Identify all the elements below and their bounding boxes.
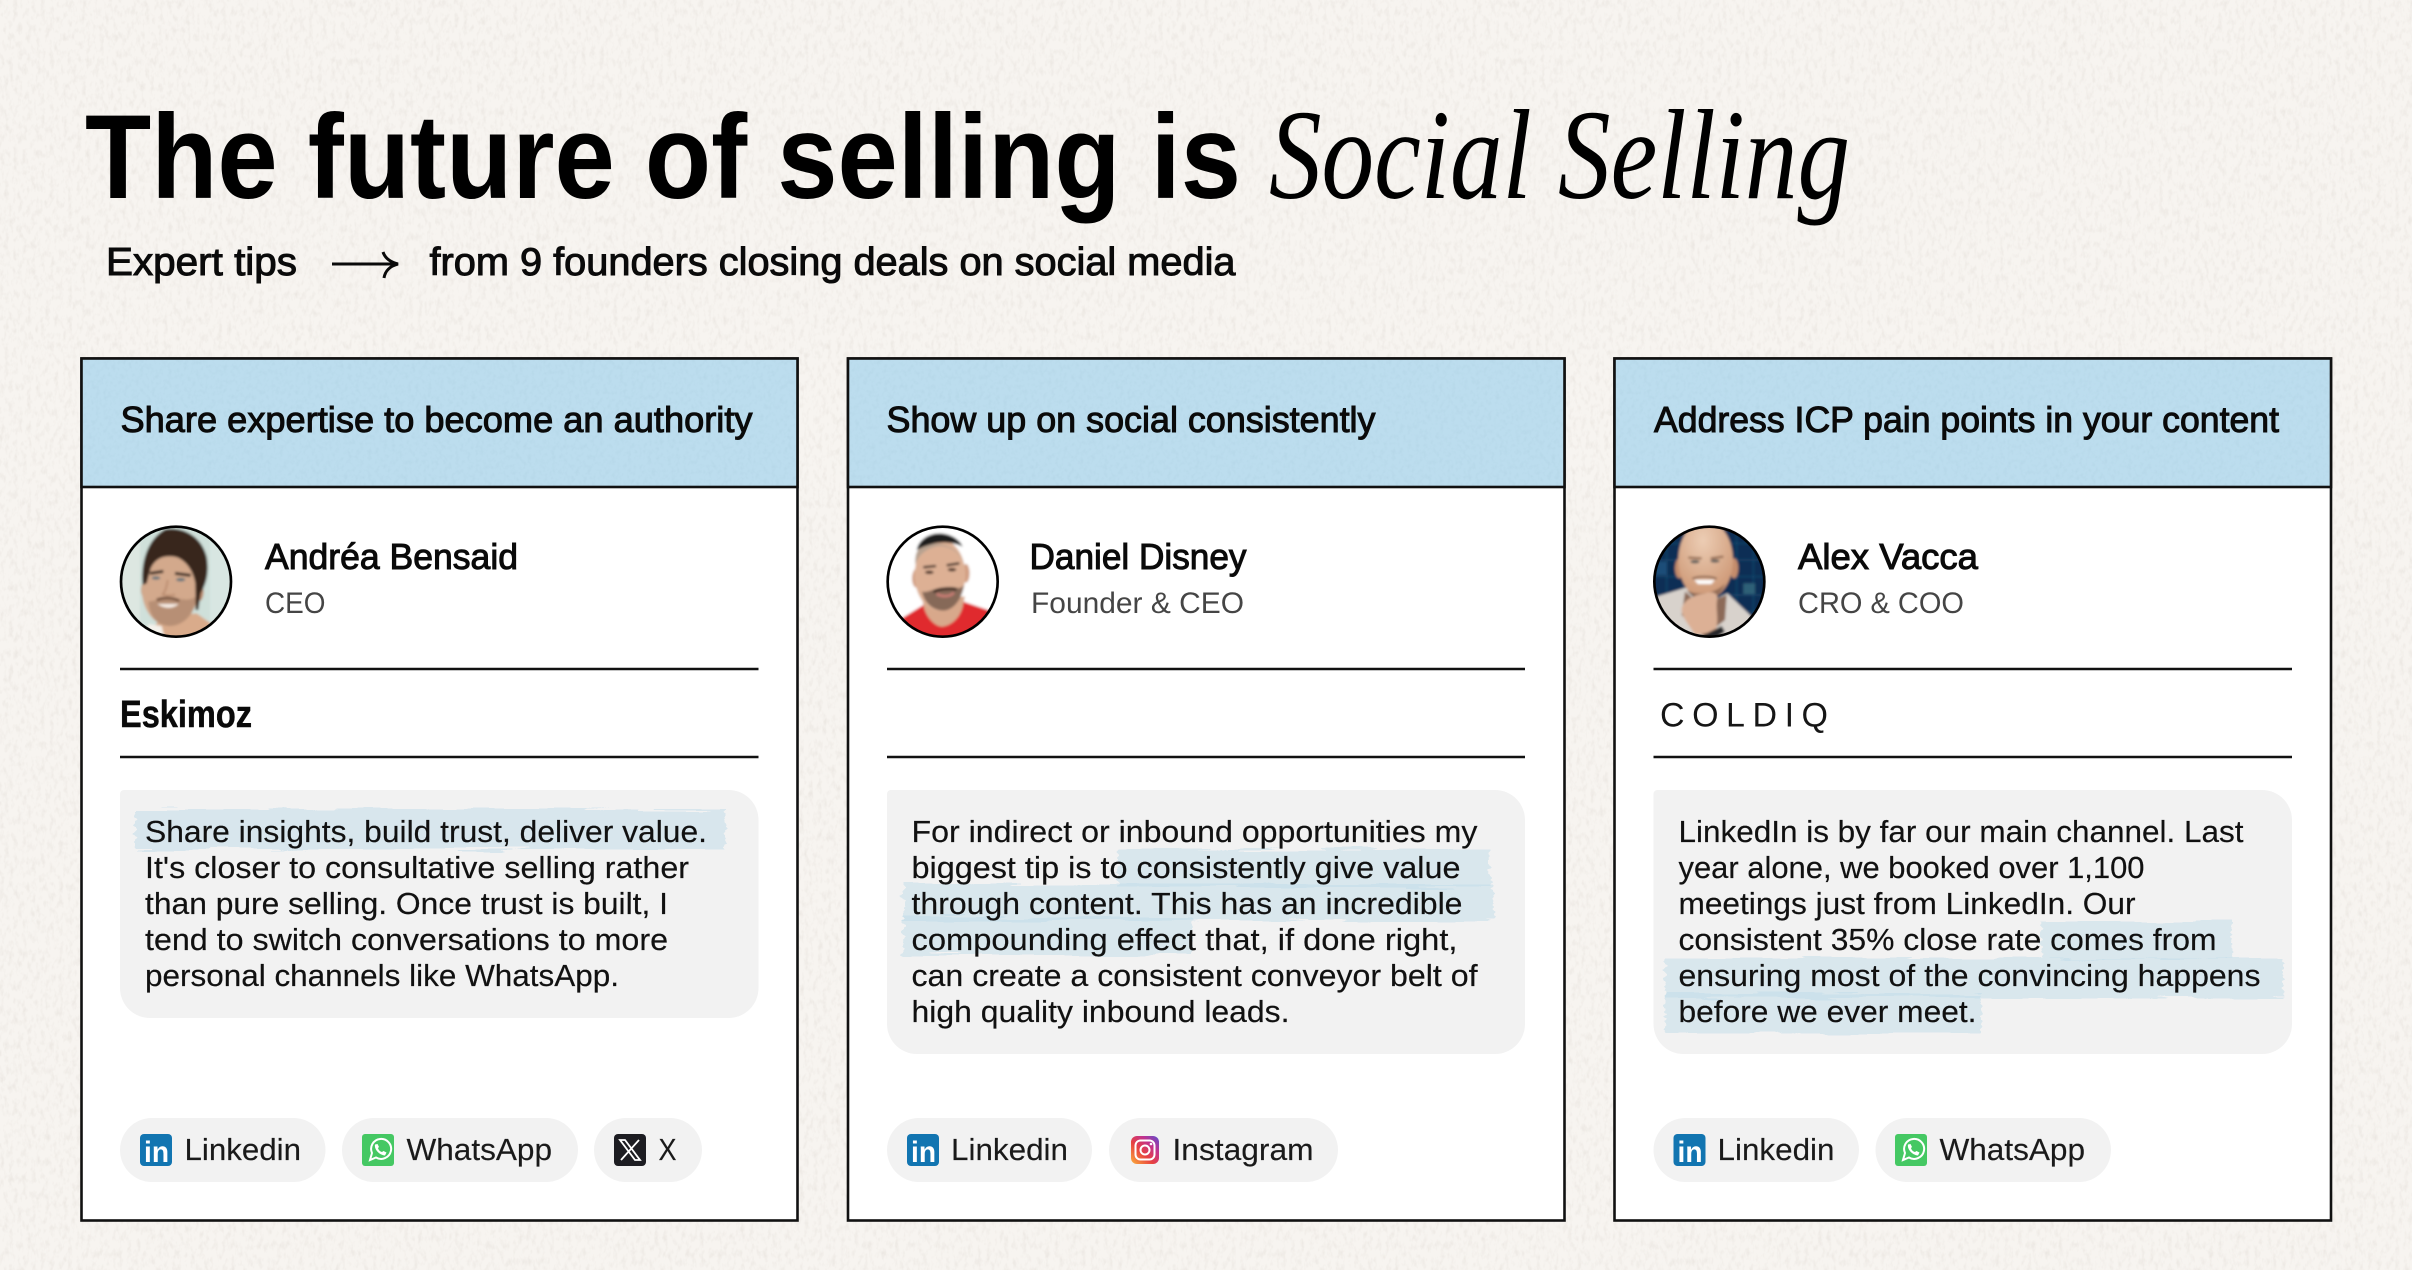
highlight brush stroke (135, 809, 725, 849)
subtitle: from 9 founders closing deals on social media (430, 241, 1236, 284)
channel pill: X: X (658, 1132, 677, 1167)
quote bubble: meetings just from LinkedIn. Our (1678, 886, 2136, 921)
quote bubble: biggest tip is to consistently give value (912, 850, 1460, 885)
quote bubble: LinkedIn is by far our main channel. Last (1678, 814, 2244, 849)
name and role (1798, 536, 1979, 620)
name and role (1030, 536, 1246, 620)
channel pill: Linkedin (1654, 1118, 1859, 1182)
channel pill: Linkedin: in (911, 1136, 936, 1169)
company logo: COLDIQ: COLDIQ (1660, 696, 1828, 734)
name and role: CEO (265, 587, 326, 620)
panel: card 1 (82, 358, 798, 1220)
highlight brush strokes (1665, 921, 2283, 1033)
name and role: Founder & CEO (1031, 587, 1244, 620)
quote bubble: year alone, we booked over 1,100 (1678, 850, 2144, 885)
channel pill: Linkedin: Linkedin (184, 1132, 301, 1167)
card 2 header band (848, 358, 1564, 487)
quote bubble (1654, 790, 2292, 1054)
name and role: Andréa Bensaid (265, 536, 518, 577)
quote bubble: compounding effect that, if done right, (912, 922, 1458, 957)
channel pill: X (594, 1118, 702, 1182)
title: Social Selling (1269, 84, 1850, 226)
quote bubble: high quality inbound leads. (912, 994, 1290, 1029)
quote bubble: personal channels like WhatsApp. (145, 958, 619, 993)
card 3 header band (1614, 358, 2331, 487)
avatar: Andréa Bensaid (120, 526, 233, 640)
quote bubble: ensuring most of the convincing happens (1678, 958, 2260, 993)
channel pill: Instagram (1109, 1118, 1338, 1182)
name and role: Alex Vacca (1798, 536, 1979, 577)
title: The future of selling is (85, 90, 1241, 224)
quote bubble (887, 790, 1525, 1054)
channel pill: Linkedin: Linkedin (1718, 1132, 1834, 1167)
subtitle: Expert tips (106, 241, 297, 284)
quote bubble: than pure selling. Once trust is built, I (145, 886, 668, 921)
card 3 header band: Address ICP pain points in your content (1654, 399, 2279, 440)
quote bubble: Share insights, build trust, deliver value. (145, 814, 707, 849)
quote bubble (120, 790, 758, 1018)
name and role (265, 536, 518, 620)
quote bubble: before we ever meet. (1678, 994, 1976, 1029)
avatar: Daniel Disney (887, 526, 1000, 639)
channel pill: Linkedin (120, 1118, 326, 1182)
quote bubble: It's closer to consultative selling rather (145, 850, 689, 885)
quote bubble: can create a consistent conveyor belt of (912, 958, 1478, 993)
card 2 header band: Show up on social consistently (886, 399, 1376, 440)
channel pill: Linkedin: in (144, 1136, 169, 1169)
card 1 header band (82, 358, 798, 487)
channel pill: Linkedin: in (1678, 1136, 1702, 1169)
quote bubble: For indirect or inbound opportunities my (912, 814, 1478, 849)
icon: arrow (332, 252, 398, 278)
highlight brush strokes (903, 849, 1493, 955)
channel pill: Instagram: Instagram (1172, 1132, 1314, 1167)
channel pill: Linkedin (887, 1118, 1092, 1182)
quote bubble: through content. This has an incredible (912, 886, 1462, 921)
panel: card 2 (848, 358, 1564, 1220)
name and role: CRO & COO (1798, 587, 1964, 620)
quote bubble: consistent 35% close rate comes from (1678, 922, 2216, 957)
channel pill: WhatsApp: WhatsApp (1940, 1132, 2085, 1167)
channel pill: WhatsApp (1876, 1118, 2111, 1182)
name and role: Daniel Disney (1030, 536, 1246, 577)
channel pill: WhatsApp: WhatsApp (406, 1132, 552, 1167)
panel: card 3 (1614, 358, 2331, 1220)
card 1 header band: Share expertise to become an authority (120, 399, 752, 440)
avatar: Alex Vacca (1653, 521, 1767, 640)
title (85, 84, 1850, 226)
channel pill: WhatsApp (342, 1118, 578, 1182)
channel pill: Linkedin: Linkedin (951, 1132, 1068, 1167)
company logo: Eskimoz: Eskimoz (120, 694, 252, 736)
quote bubble: tend to switch conversations to more (145, 922, 668, 957)
